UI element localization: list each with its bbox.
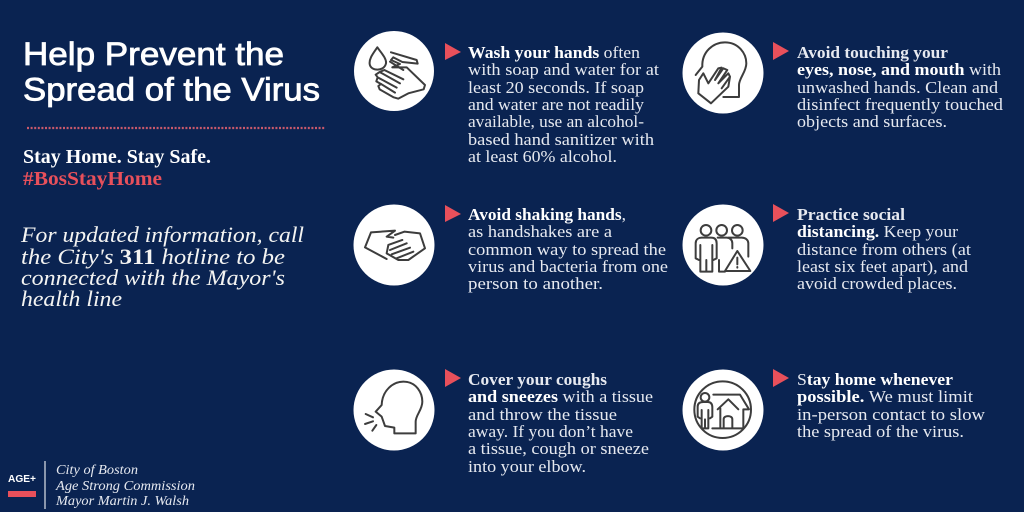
- text: avoid touching: disinfect frequently touched: [797, 95, 1004, 114]
- text: cover coughs: and sneezes with a tissue: [468, 387, 653, 406]
- text: stay home: possible. We must limit: [797, 387, 973, 406]
- icon: hand washing: [354, 31, 434, 111]
- panel: avoid touching face: [682, 32, 1004, 131]
- hotline information text: For updated information, call: [20, 222, 304, 247]
- logo: AGE+: [8, 473, 36, 497]
- icon: people with warning sign: [682, 204, 764, 286]
- arrow: [445, 43, 461, 60]
- icon: person and house in ring: [682, 370, 764, 450]
- text: shaking hands: Avoid shaking hands,: [468, 205, 626, 224]
- text: shaking hands: as handshakes are a: [468, 222, 612, 241]
- credits text: Age Strong Commission: [55, 479, 195, 494]
- icon: coughing head: [354, 370, 434, 450]
- panel: cover your coughs: [354, 369, 653, 476]
- text: cover coughs: [468, 370, 653, 476]
- text: wash hands: and water are not readily: [468, 95, 645, 114]
- text: wash hands: Wash your hands often: [468, 43, 641, 62]
- title: [23, 36, 320, 108]
- text: avoid touching: eyes, nose, and mouth with: [797, 60, 1002, 79]
- icon: handshake: [354, 204, 434, 286]
- arrow: [445, 369, 461, 387]
- slogan: [23, 146, 211, 190]
- text: avoid touching: unwashed hands. Clean and: [797, 78, 999, 97]
- text: shaking hands: [468, 205, 668, 293]
- text: distancing: least six feet apart), and: [797, 257, 969, 276]
- slogan: #BosStayHome: [23, 168, 162, 190]
- text: distancing: distancing. Keep your: [797, 222, 958, 241]
- hotline information text: connected with the Mayor's: [21, 265, 285, 290]
- text: wash hands: [468, 43, 659, 166]
- text: distancing: distance from others (at: [797, 240, 971, 259]
- title: Spread of the Virus: [23, 72, 320, 108]
- text: cover coughs: a tissue, cough or sneeze: [468, 439, 649, 458]
- icon: hand on face: [682, 32, 764, 114]
- arrow: [773, 42, 789, 60]
- title: Help Prevent the: [23, 36, 284, 72]
- text: avoid touching: Avoid touching your: [797, 43, 948, 62]
- text: wash hands: least 20 seconds. If soap: [468, 78, 644, 97]
- text: shaking hands: virus and bacteria from one: [468, 257, 668, 276]
- arrow: [773, 204, 789, 222]
- text: cover coughs: into your elbow.: [468, 457, 586, 476]
- hotline information text: the City's 311 hotline to be: [21, 244, 285, 269]
- panel: social distancing: [682, 204, 971, 293]
- text: cover coughs: Cover your coughs: [468, 370, 607, 389]
- text: cover coughs: away. If you don’t have: [468, 422, 633, 441]
- text: stay home: in-person contact to slow: [797, 405, 986, 424]
- credits text: [55, 463, 195, 509]
- hotline information text: [20, 222, 304, 311]
- text: stay home: the spread of the virus.: [797, 422, 964, 441]
- arrow: [773, 369, 789, 387]
- text: distancing: Practice social: [797, 205, 905, 224]
- text: wash hands: with soap and water for at: [468, 60, 659, 79]
- arrow: [445, 205, 461, 222]
- text: distancing: [797, 205, 971, 293]
- text: shaking hands: common way to spread the: [468, 240, 666, 259]
- panel: stay home: [682, 369, 986, 450]
- credits text: Mayor Martin J. Walsh: [55, 494, 189, 509]
- text: wash hands: based hand sanitizer with: [468, 130, 655, 149]
- slogan: Stay Home. Stay Safe.: [23, 146, 211, 168]
- text: stay home: [797, 370, 986, 441]
- text: wash hands: at least 60% alcohol.: [468, 147, 617, 166]
- text: avoid touching: objects and surfaces.: [797, 112, 947, 131]
- panel: avoid shaking hands: [354, 204, 668, 293]
- text: avoid touching: [797, 43, 1004, 131]
- hotline information text: health line: [21, 286, 122, 311]
- text: shaking hands: person to another.: [468, 274, 603, 293]
- text: wash hands: available, use an alcohol-: [468, 112, 644, 131]
- text: cover coughs: and throw the tissue: [468, 405, 617, 424]
- footer: Age Strong logo and credits: [8, 461, 195, 509]
- panel: wash your hands: [354, 31, 659, 166]
- credits text: City of Boston: [56, 463, 138, 478]
- text: stay home: Stay home whenever: [797, 370, 953, 389]
- logo: AGE+: AGE+: [8, 473, 36, 485]
- text: distancing: avoid crowded places.: [797, 274, 957, 293]
